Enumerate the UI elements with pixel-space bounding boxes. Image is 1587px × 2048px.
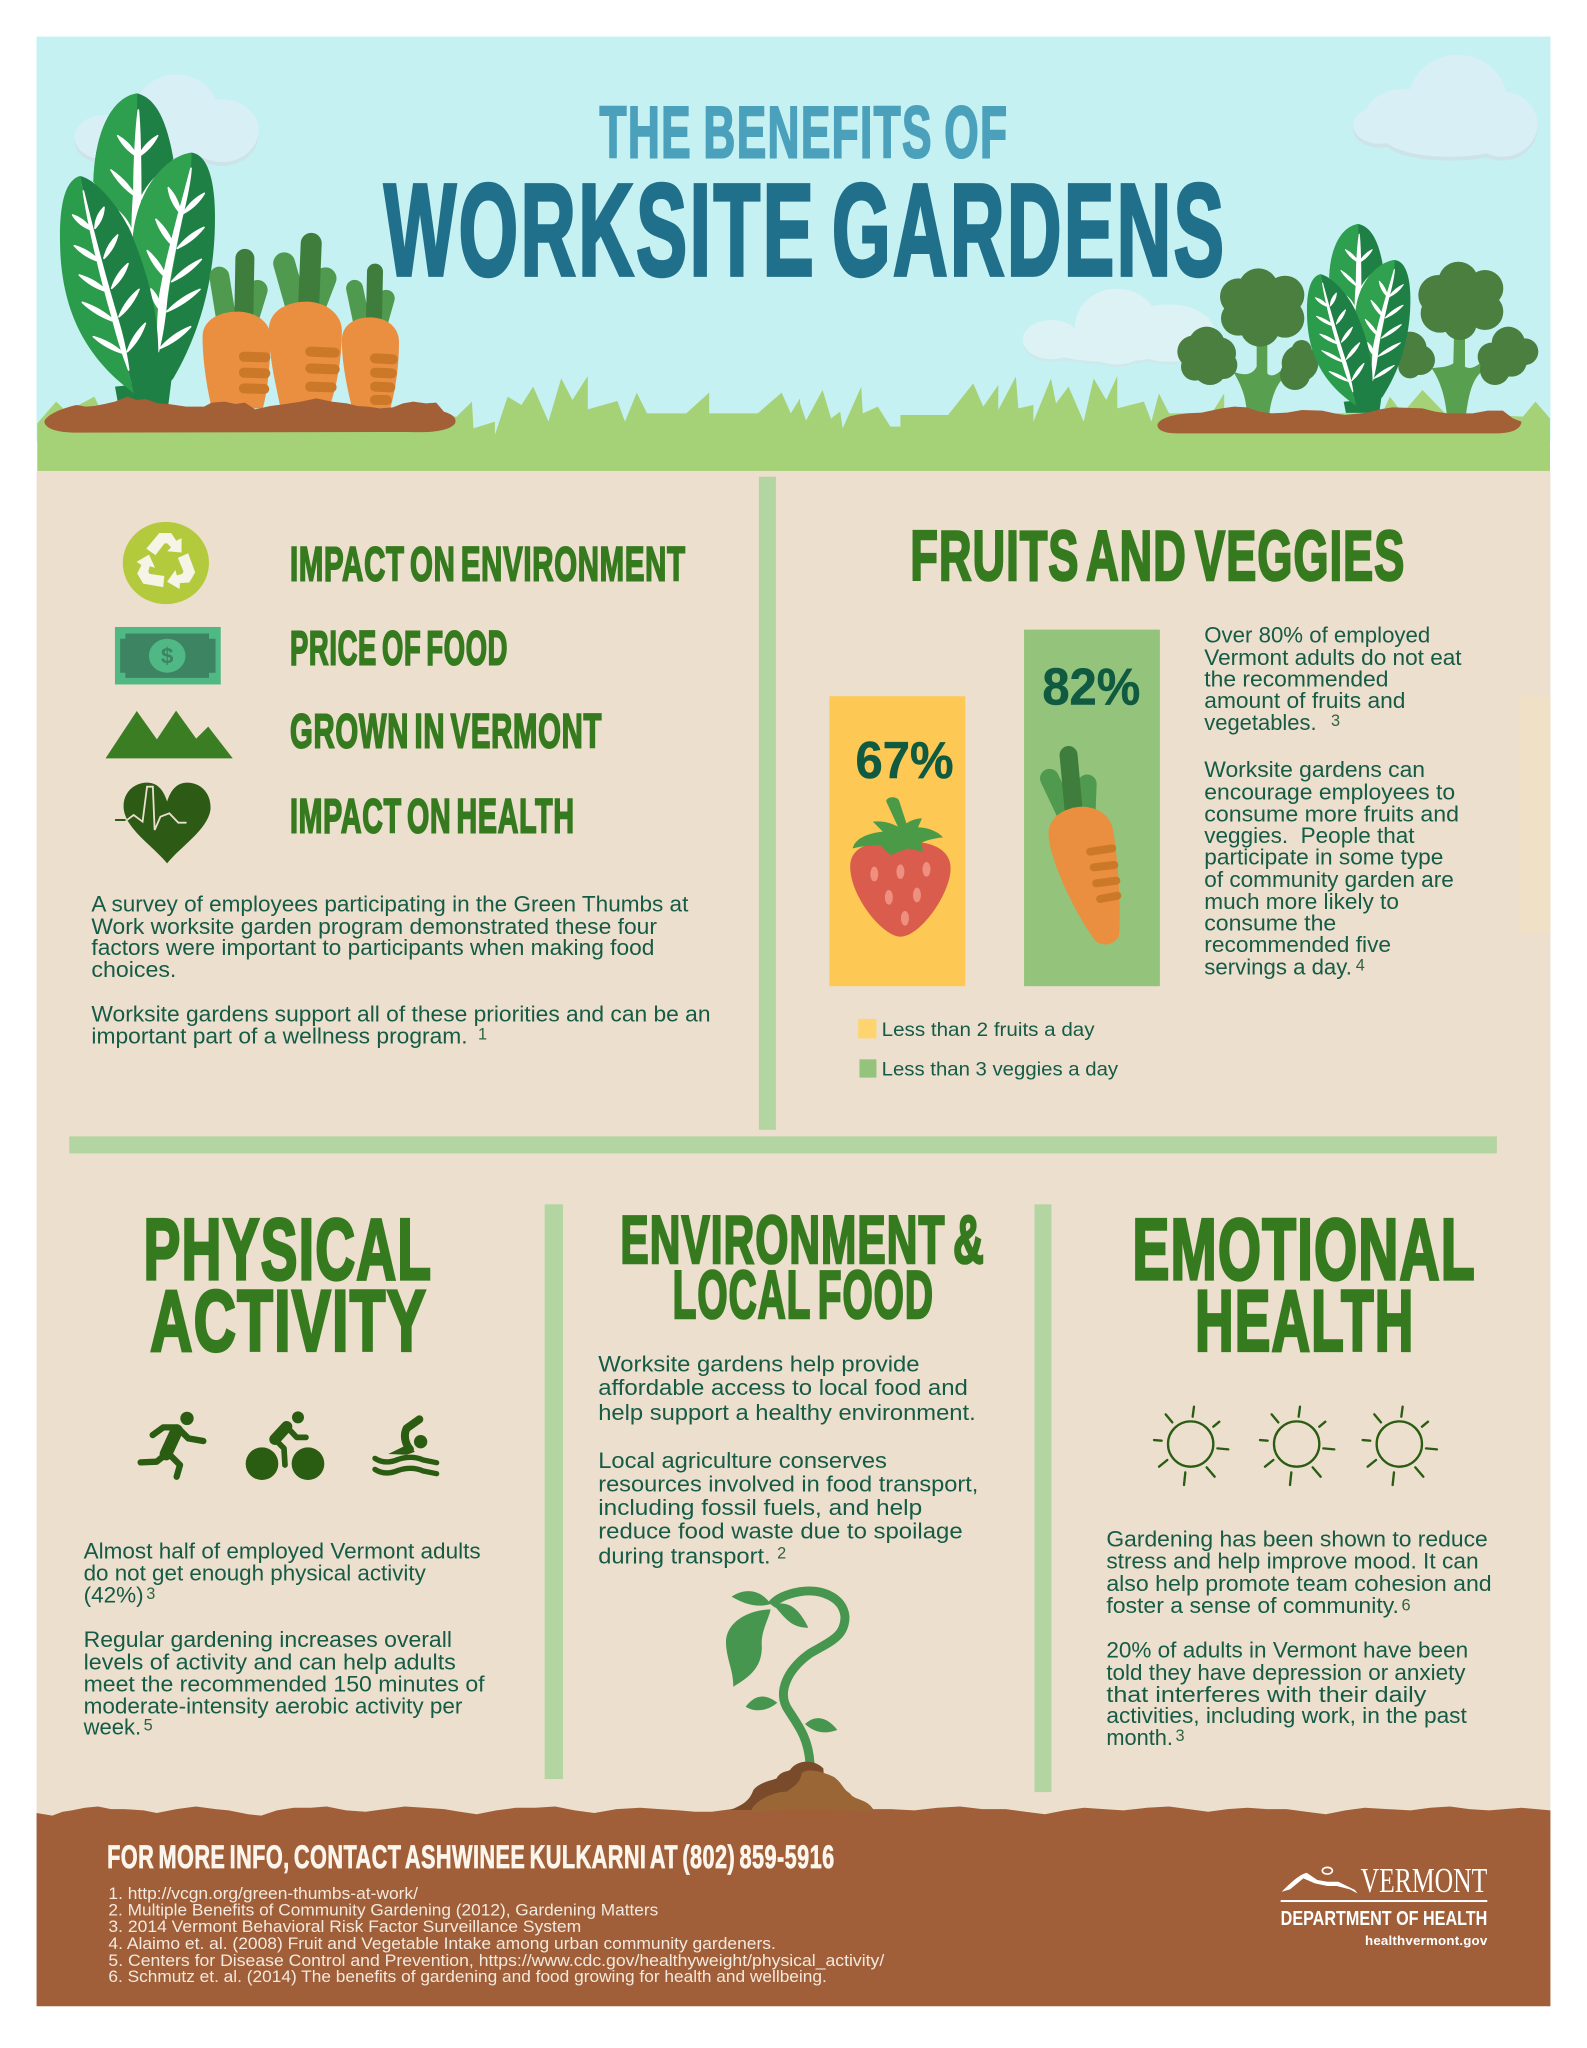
footer: references: 6. Schmutz et. al. (2014) The benefits of gardening and food growing for health and wellbeing. [108,1968,827,1986]
text: regular gardening: moderate-intensity aerobic activity per [84,1694,462,1719]
illustration: broccoli and spinach right [1157,224,1538,433]
heading [1132,1202,1476,1370]
text: stress and mood [1106,1527,1492,1618]
text: regular gardening: week. [83,1715,141,1740]
title line 2: GARDENS [832,157,1226,303]
text: half of adults [84,1538,481,1608]
text: stress and mood: foster a sense of community. [1106,1593,1399,1618]
text: affordable access: affordable access to local food and [598,1375,968,1400]
footer: Vermont Department of Health logo: healthvermont.gov [1365,1933,1488,1948]
icon: carrot [1048,755,1120,944]
icon: money [115,627,221,684]
text: survey paragraph: Work worksite garden program demonstrated these four [91,914,657,939]
text: stress and mood: Gardening has been shown to reduce [1106,1527,1488,1552]
panel: beige body [37,471,1550,1829]
icons: three suns [1154,1407,1437,1485]
text: regular gardening [83,1627,486,1740]
footer: references: 3. 2014 Vermont Behavioral Risk Factor Surveillance System [108,1918,581,1936]
mound [730,1762,827,1810]
text: wellness paragraph: Worksite gardens support all of these priorities and can be an [91,1001,711,1026]
text: survey paragraph [91,892,688,982]
icon: swimmer [375,1419,437,1474]
divider: upper vertical [759,477,776,1130]
heading [620,1203,985,1333]
text: worksite gardens can: 4 [1356,957,1365,975]
text: over 80%: vegetables. [1204,710,1317,735]
bar: fruits 67% [829,696,965,986]
text: survey paragraph: choices. [91,957,176,982]
panel: physical activity [83,1202,486,1740]
heading: ENVIRONMENT & [620,1203,985,1278]
icon: heart with heartbeat [116,783,211,863]
text: depression statistics: activities, including work, in the past [1106,1703,1467,1728]
heading: PHYSICAL [144,1202,432,1298]
text: worksite gardens can: of community garden are [1204,867,1454,892]
legend: Less than 3 veggies a day [882,1059,1118,1081]
text: worksite gardens can: consume more fruits and [1204,802,1459,827]
text: affordable access [598,1352,976,1425]
text: worksite gardens can: veggies. People that [1204,823,1415,848]
text: half of adults: do not get enough physical activity [84,1560,426,1585]
text: regular gardening: meet the recommended 150 minutes of [84,1672,486,1697]
text: regular gardening: levels of activity and can help adults [84,1649,456,1674]
text: half of adults: Almost half of employed Vermont adults [84,1538,481,1563]
text: survey paragraph: A survey of employees participating in the Green Thumbs at [91,892,688,917]
text: over 80%: 3 [1331,712,1340,730]
footer: soil band [37,1806,1550,2006]
text: wellness paragraph: 1 [478,1026,487,1044]
panel: emotional health [1106,1202,1492,1750]
divider: horizontal [69,1136,1497,1153]
footer: Vermont Department of Health logo: VERMONT [1361,1861,1487,1900]
text: wellness paragraph: important part of a wellness program. [91,1024,468,1049]
bar: fruits 67%: 67% [856,732,954,790]
broccoli stems [1233,337,1482,415]
text: over 80%: amount of fruits and [1204,688,1405,713]
footer: references: 5. Centers for Disease Control and Prevention, https://www.cdc.gov/healthyweight/physical_activity/ [108,1952,885,1970]
title line 1: THE BENEFITS OF [600,92,1008,173]
footer: references: 2. Multiple Benefits of Community Gardening (2012), Gardening Matters [108,1902,658,1920]
divider: lower right vertical [1034,1204,1051,1792]
text: worksite gardens can: Worksite gardens can [1204,757,1425,782]
label: grown in vermont: GROWN IN VERMONT [290,705,602,759]
heading [144,1202,432,1370]
panel: priorities [91,522,711,1049]
broccoli crowns [1177,262,1538,390]
heading: ACTIVITY [150,1274,427,1370]
footer: references: 1. http://vcgn.org/green-thumbs-at-work/ [108,1885,419,1903]
text: local agriculture [598,1448,978,1569]
panel: environment and local food [598,1203,985,1569]
cloud: top left [74,74,259,166]
text: local agriculture: 2 [777,1544,786,1562]
text: local agriculture: Local agriculture conserves [598,1448,887,1473]
text: survey paragraph: factors were important to participants when making food [91,935,654,960]
text: stress and mood: stress and help improve mood. It can [1106,1549,1479,1574]
text: over 80%: the recommended [1204,666,1388,691]
text: affordable access: help support a healthy environment. [598,1400,976,1425]
grass strip [37,376,1550,472]
legend [858,1019,1118,1081]
footer: references [108,1885,885,1986]
text: depression statistics [1106,1638,1468,1750]
panel: sky background [37,37,1550,442]
icon: cyclist [246,1411,324,1480]
text: depression statistics: month. [1106,1725,1173,1750]
footer: Vermont Department of Health logo [1281,1861,1488,1948]
cloud: middle [1023,289,1215,367]
text: depression statistics: told they have depression or anxiety [1106,1660,1466,1685]
cloud: top right [1353,55,1537,161]
soil right [1157,407,1521,433]
text: worksite gardens can: encourage employees to [1204,779,1455,804]
text: wellness paragraph [91,1001,711,1049]
label: impact on health: IMPACT ON HEALTH [290,789,575,843]
text: worksite gardens can [1204,757,1459,979]
label: impact on environment: IMPACT ON ENVIRONMENT [290,537,686,591]
text: worksite gardens can: servings a day. [1204,954,1352,979]
text: local agriculture: reduce food waste due to spoilage [598,1519,963,1544]
text: half of adults: 3 [146,1585,155,1603]
bar: veggies 82% [1024,630,1160,986]
footer: references: 4. Alaimo et. al. (2008) Fruit and Vegetable Intake among urban community gardeners. [108,1935,776,1953]
heading: HEALTH [1195,1274,1415,1370]
text: over 80%: Vermont adults do not eat [1204,645,1462,670]
text: regular gardening: Regular gardening increases overall [84,1627,452,1652]
footer: Vermont Department of Health logo: DEPARTMENT OF HEALTH [1281,1908,1487,1930]
text: affordable access: Worksite gardens help provide [598,1352,920,1377]
text: depression statistics: 20% of adults in Vermont have been [1106,1638,1468,1663]
legend: Less than 2 fruits a day [882,1019,1095,1041]
text: over 80%: Over 80% of employed [1204,623,1430,648]
text: worksite gardens can: consume the [1204,911,1336,936]
text: stress and mood: also help promote team cohesion and [1106,1571,1492,1596]
footer: contact heading: FOR MORE INFO, CONTACT ASHWINEE KULKARNI AT (802) 859-5916 [107,1838,835,1875]
icon: strawberry [850,797,951,937]
text: stress and mood: 6 [1402,1597,1411,1615]
panel: fruits and veggies [829,516,1462,1081]
text: over 80% [1204,623,1462,735]
title [384,92,1226,303]
bar: veggies 82%: 82% [1042,659,1140,717]
text: worksite gardens can: participate in some type [1204,845,1443,870]
text: local agriculture: including fossil fuels, and help [598,1495,922,1520]
illustration: sprout [726,1591,887,1823]
text: local agriculture: resources involved in food transport, [598,1472,978,1497]
text: depression statistics: 3 [1176,1727,1185,1745]
text: worksite gardens can: much more likely to [1204,889,1399,914]
label: price of food: PRICE OF FOOD [290,622,508,676]
divider: lower left vertical [545,1204,563,1779]
text: half of adults: (42%) [84,1583,144,1608]
icon: money: $ [161,644,174,669]
title line 2: WORKSITE [384,157,816,303]
heading: LOCAL FOOD [673,1258,934,1333]
icon: runner [141,1412,203,1477]
illustration: spinach left [60,93,215,405]
text: worksite gardens can: recommended five [1204,932,1391,957]
text: depression statistics: that interferes with their daily [1106,1682,1426,1707]
text: local agriculture: during transport. [598,1544,771,1569]
ghost bar at right edge [1519,696,1550,933]
illustration: carrots [203,243,399,408]
icon: recycle [123,522,209,604]
text: regular gardening: 5 [144,1717,153,1735]
icon: mountains [106,711,233,758]
illustration: soil left [44,397,456,433]
